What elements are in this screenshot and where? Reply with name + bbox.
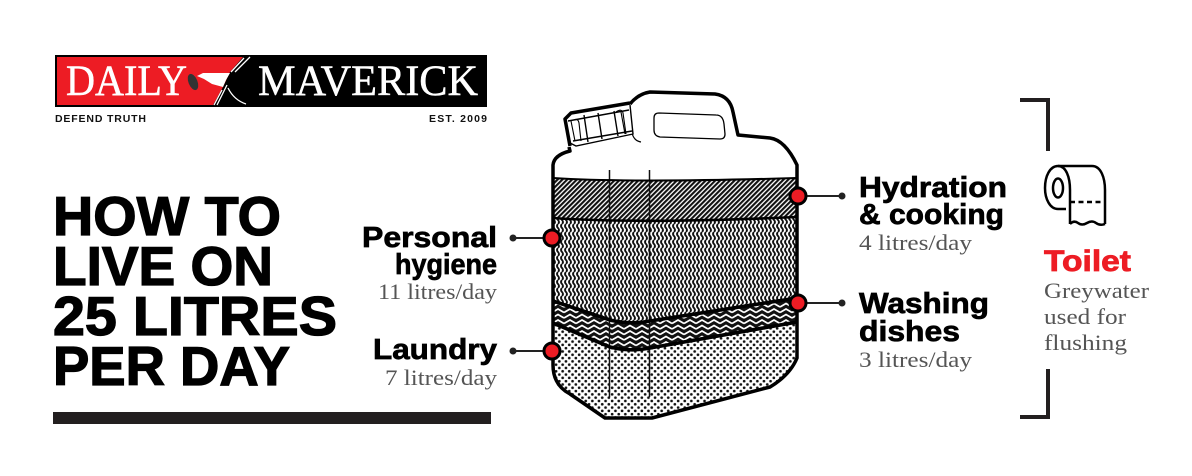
- logo: Daily Maverick masthead: [55, 55, 487, 107]
- label: washing dishes: Washing: [859, 288, 989, 320]
- label: laundry: Laundry: [373, 334, 497, 366]
- cap ridges: [571, 110, 626, 141]
- logo wordmark: Maverick: MAVERICK: [258, 58, 478, 105]
- toilet text: flushing: [1044, 330, 1127, 355]
- logo red panel: [57, 57, 243, 105]
- cap: [565, 103, 633, 146]
- label: hydration and cooking: & cooking: [859, 199, 1004, 231]
- connector: hydration: [790, 188, 846, 204]
- water bands: [553, 178, 797, 420]
- label: personal hygiene: 11 litres/day: [378, 279, 497, 304]
- label: personal hygiene: hygiene: [395, 249, 497, 281]
- label: washing dishes: dishes: [859, 316, 960, 348]
- label: personal hygiene: [362, 222, 497, 304]
- band divider lines: [553, 178, 797, 350]
- handle hole: [654, 113, 725, 139]
- bracket bottom: [1020, 369, 1048, 417]
- toilet text: Greywater: [1044, 278, 1150, 303]
- connector: washing dishes: [790, 295, 846, 311]
- centre seams: [610, 170, 650, 397]
- jerrycan outline: [553, 92, 797, 418]
- logo date: EST. 2009: [429, 113, 487, 125]
- jerrycan body: [553, 92, 797, 418]
- band: personal hygiene: [553, 217, 797, 323]
- label: personal hygiene: Personal: [362, 222, 497, 254]
- title: LIVE ON: [53, 235, 273, 297]
- band: washing dishes: [554, 301, 796, 348]
- label: hydration and cooking: Hydration: [859, 172, 1007, 204]
- logo eagle emblem: [186, 57, 250, 105]
- band: laundry: [553, 322, 797, 420]
- toilet text: Toilet: [1044, 245, 1131, 278]
- title: 25 LITRES: [53, 285, 337, 347]
- label: laundry: 7 litres/day: [385, 365, 497, 390]
- band: hydration and cooking: [553, 178, 797, 221]
- icon: toilet roll: [1045, 166, 1105, 225]
- title: PER DAY: [53, 335, 290, 397]
- toilet text: used for: [1044, 304, 1127, 329]
- label: washing dishes: 3 litres/day: [859, 347, 972, 372]
- title underline bar: [53, 412, 491, 424]
- title: [53, 185, 337, 397]
- neck curve: [632, 133, 641, 142]
- bracket top: [1020, 100, 1048, 151]
- jerrycan illustration: [553, 92, 797, 420]
- label: laundry: [373, 334, 497, 390]
- logo background: [55, 55, 487, 107]
- title: HOW TO: [53, 185, 281, 247]
- label: hydration and cooking: 4 litres/day: [859, 230, 972, 255]
- logo tagline: DEFEND TRUTH: [55, 113, 146, 125]
- connector: personal hygiene: [510, 230, 560, 246]
- logo wordmark: Daily: DAILY: [66, 58, 187, 105]
- label: hydration and cooking: [859, 172, 1007, 255]
- toilet text: [1044, 245, 1150, 355]
- connector: laundry: [510, 343, 560, 359]
- label: washing dishes: [859, 288, 989, 372]
